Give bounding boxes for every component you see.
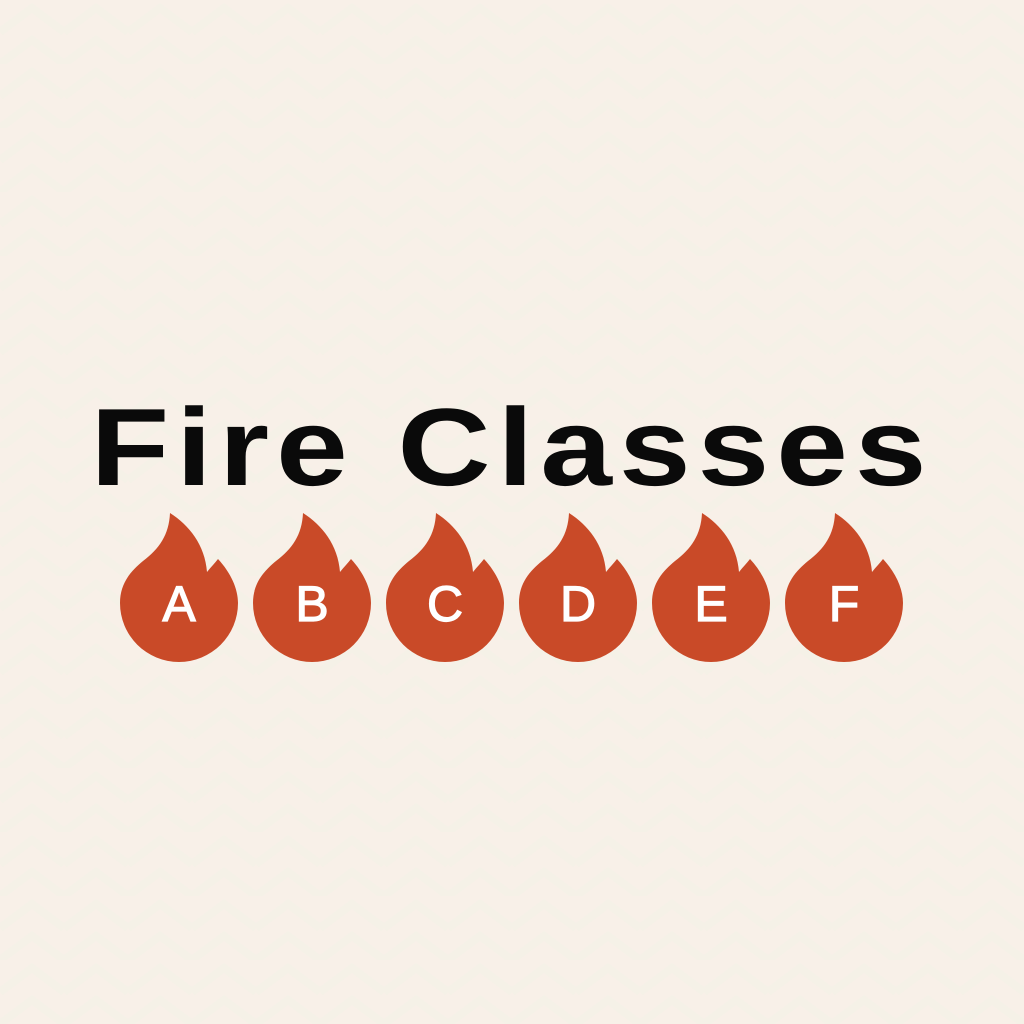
icon: flame A: A [162, 576, 196, 632]
icon: flame F: F [829, 576, 859, 632]
icon: flame E: E [694, 576, 728, 632]
icon: flame D: D [560, 576, 596, 632]
icon: flame C [386, 513, 504, 662]
title: Fire Classes [90, 386, 934, 509]
icon: flame D [519, 513, 637, 662]
icon: flame B: B [295, 576, 329, 632]
flame icons [120, 513, 903, 662]
icon: flame F [785, 513, 903, 662]
icon: flame C: C [427, 576, 463, 632]
icon: flame E [652, 513, 770, 662]
icon: flame B [253, 513, 371, 662]
icon: flame A [120, 513, 238, 662]
